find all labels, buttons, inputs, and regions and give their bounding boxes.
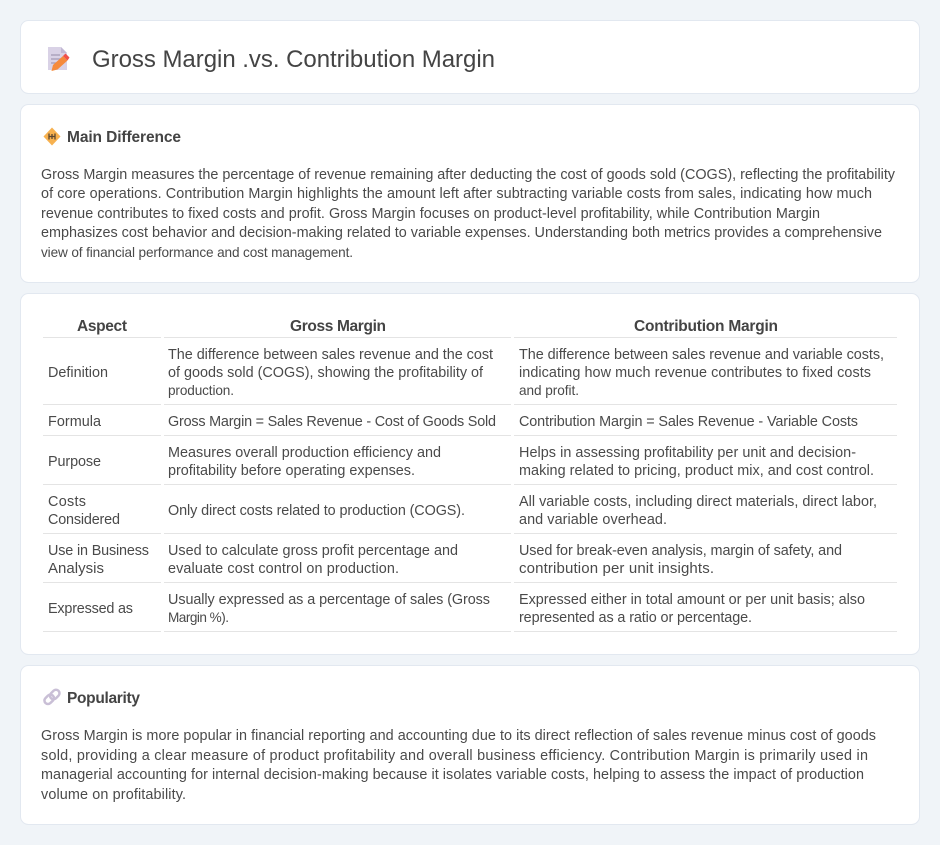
table row: costs considered: Costs	[48, 494, 86, 510]
text block: popularity paragraph: sold, providing a clear measure of product profitability and overall business efficiency. Contribution Margin is primarily used in	[41, 748, 868, 764]
table row: definition	[43, 347, 897, 405]
table row: definition: production.	[168, 383, 234, 398]
panel: popularity	[20, 666, 920, 824]
table row: definition: The difference between sales revenue and the cost	[168, 347, 493, 363]
table row: use in business analysis: evaluate cost control on production.	[168, 561, 399, 577]
text block: main difference paragraph: emphasizes cost behavior and decision-making related to variable expenses. Understanding both metrics provides a comprehensive	[41, 225, 882, 241]
table row: purpose: Purpose	[48, 454, 101, 470]
table row: costs considered: and variable overhead.	[519, 512, 667, 528]
text block: popularity paragraph: volume on profitability.	[41, 787, 186, 803]
icon: chain link	[43, 688, 61, 706]
icon: warning diamond	[44, 128, 60, 146]
text block: popularity paragraph: Gross Margin is more popular in financial reporting and accounting due to its direct reflection of sales revenue minus cost of goods	[41, 728, 876, 744]
table row: definition: of goods sold (COGS), showing the profitability of	[168, 365, 484, 381]
table row: formula: Formula	[48, 414, 101, 430]
table header row: Aspect	[77, 318, 127, 335]
panel: comparison table	[20, 294, 920, 654]
icon: document with pencil	[48, 47, 70, 71]
table row: definition: Definition	[48, 365, 108, 381]
heading: popularity: Popularity	[67, 690, 140, 707]
table row: use in business analysis: Analysis	[48, 560, 104, 577]
table row: use in business analysis	[43, 543, 897, 583]
table row: costs considered	[43, 494, 897, 534]
text block: popularity paragraph	[41, 728, 876, 803]
table header row: Gross Margin	[290, 318, 386, 335]
text block: main difference paragraph: revenue contributes to fixed costs and profit. Gross Margin focuses on product-level profitability, while Contribution Margin	[41, 206, 820, 222]
table row: purpose: Helps in assessing profitability per unit and decision-	[519, 445, 856, 461]
table row: purpose	[43, 445, 897, 485]
table row: formula: Contribution Margin = Sales Revenue - Variable Costs	[519, 414, 858, 430]
table row: definition: indicating how much revenue contributes to fixed costs	[519, 365, 871, 381]
table row: use in business analysis: Used to calculate gross profit percentage and	[168, 543, 458, 559]
table row: expressed as: Usually expressed as a percentage of sales (Gross	[168, 592, 490, 608]
table row: costs considered: All variable costs, including direct materials, direct labor,	[519, 494, 877, 510]
table row: definition: and profit.	[519, 383, 579, 398]
table row: use in business analysis: Use in Business	[48, 543, 149, 559]
table row: purpose: Measures overall production efficiency and	[168, 445, 441, 461]
table row: expressed as	[43, 592, 897, 632]
table row: purpose: making related to pricing, product mix, and cost control.	[519, 463, 874, 479]
panel: title header	[20, 20, 920, 94]
table row: expressed as: represented as a ratio or percentage.	[519, 610, 752, 626]
table row: costs considered: Considered	[48, 512, 120, 528]
text block: popularity paragraph: managerial accounting for internal decision-making because it isolates variable costs, helping to assess the impact of production	[41, 767, 864, 783]
table row: use in business analysis: contribution per unit insights.	[519, 560, 714, 577]
text block: main difference paragraph	[41, 167, 896, 260]
panel: main difference	[20, 104, 920, 282]
heading: main difference: Main Difference	[67, 129, 181, 146]
table row: purpose: profitability before operating expenses.	[168, 463, 415, 479]
table row: definition: The difference between sales revenue and variable costs,	[519, 347, 884, 363]
text block: main difference paragraph: view of financial performance and cost management.	[41, 245, 353, 260]
table header row	[43, 318, 897, 338]
table row: expressed as: Expressed either in total amount or per unit basis; also	[519, 592, 865, 608]
table row: expressed as: Expressed as	[48, 601, 133, 617]
table row: formula: Gross Margin = Sales Revenue - Cost of Goods Sold	[168, 414, 496, 430]
text block: main difference paragraph: of core operations. Contribution Margin highlights the amount left after subtracting variable costs from sales, indicating how much	[41, 186, 872, 202]
table row: formula	[43, 414, 897, 436]
table row: use in business analysis: Used for break-even analysis, margin of safety, and	[519, 543, 842, 559]
table header row: Contribution Margin	[634, 318, 778, 335]
title: Gross Margin .vs. Contribution Margin	[92, 46, 495, 73]
table row: costs considered: Only direct costs related to production (COGS).	[168, 503, 465, 519]
table row: expressed as: Margin %).	[168, 610, 229, 625]
text block: main difference paragraph: Gross Margin measures the percentage of revenue remaining after deducting the cost of goods sold (COGS), reflecting the profitability	[41, 167, 896, 183]
